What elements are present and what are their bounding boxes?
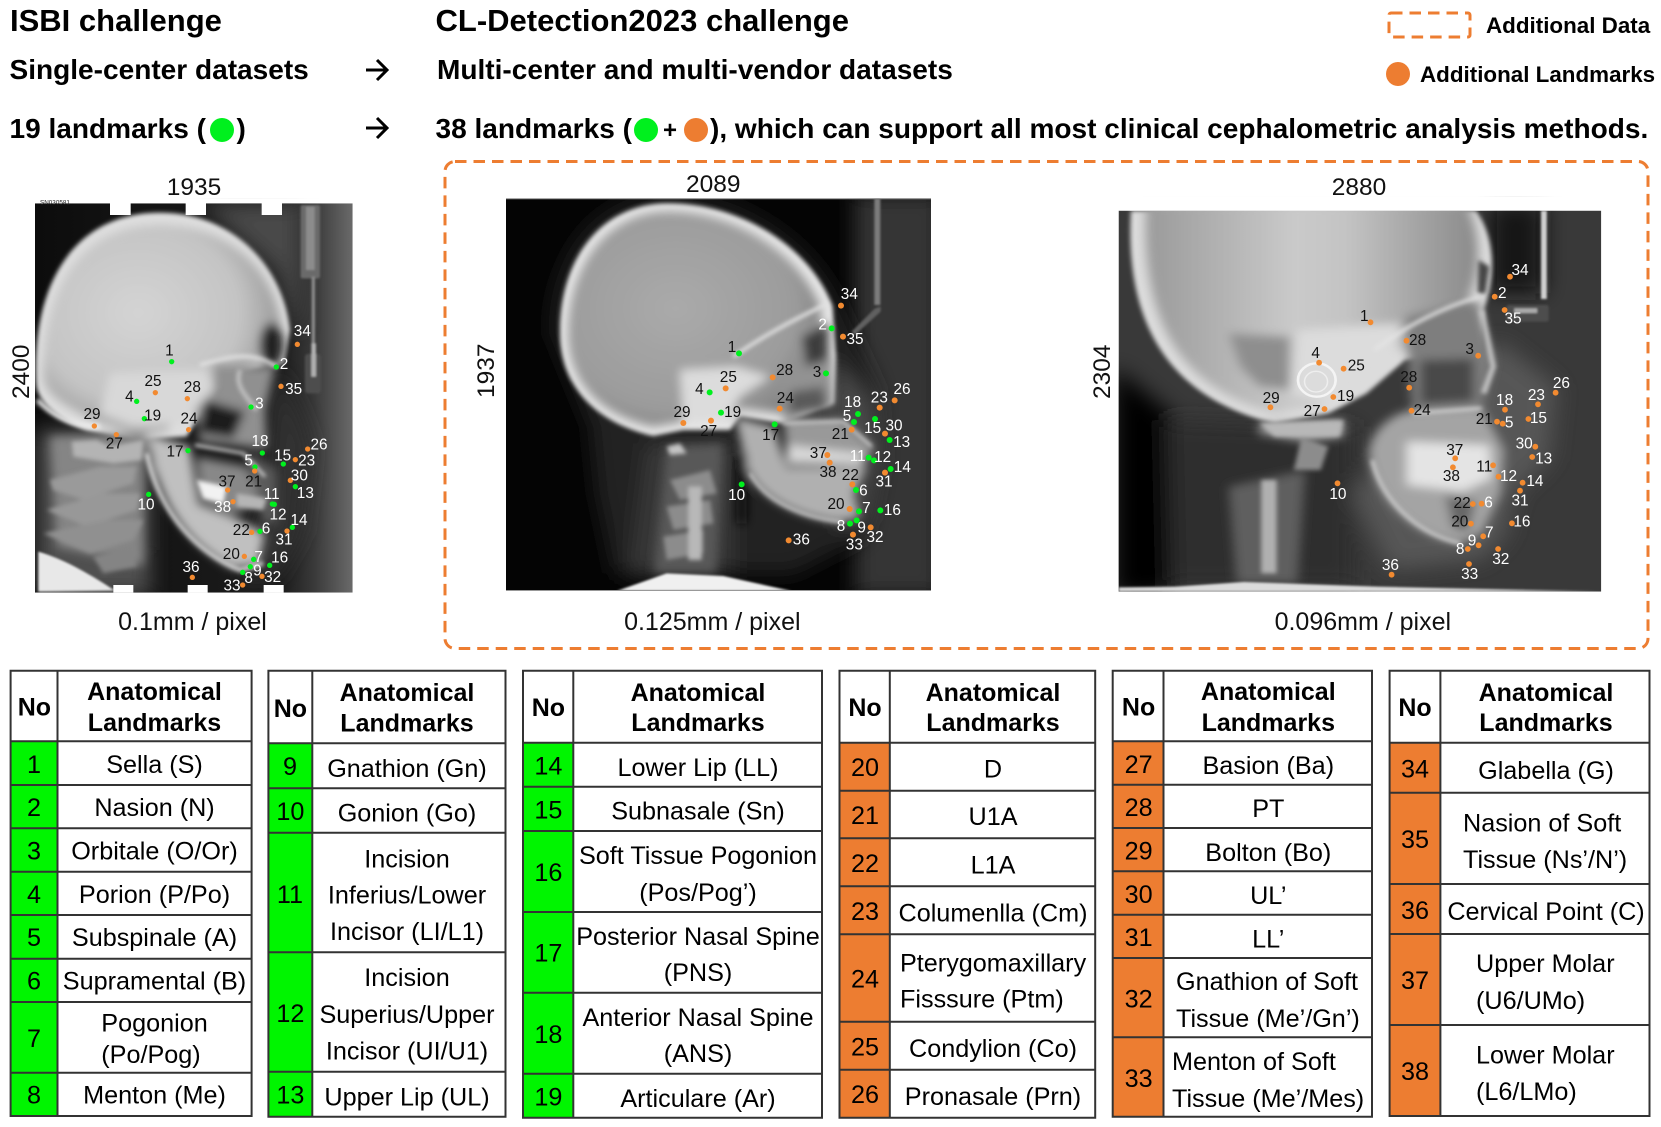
landmarks on image 2: 23 xyxy=(871,389,888,406)
image panel: CL-Detection x-ray B xyxy=(1089,174,1601,636)
rows: Tissue (Ns’/N’) xyxy=(1463,846,1627,874)
table: landmarks 14-19 xyxy=(523,671,822,1118)
rows: Incision xyxy=(364,845,450,873)
header xyxy=(1122,678,1336,737)
width label 2880: 2880 xyxy=(1332,174,1386,201)
landmarks on image 2: 15 xyxy=(864,420,881,437)
landmarks on image 1: 22 xyxy=(233,522,250,539)
rows: 6 xyxy=(27,967,41,995)
rows: LL’ xyxy=(1252,925,1284,953)
rows: Porion (P/Po) xyxy=(79,881,230,909)
landmarks on image 1: 9 xyxy=(253,562,262,579)
landmarks on image 3: 15 xyxy=(1530,410,1547,427)
landmarks on image 3: 20 xyxy=(1451,514,1468,530)
rows: Menton (Me) xyxy=(83,1081,226,1109)
landmarks on image 2: 19 xyxy=(724,404,741,421)
rows: Upper Lip (UL) xyxy=(324,1083,490,1111)
landmarks on image 2: 28 xyxy=(776,362,793,379)
rows: 26 xyxy=(851,1081,879,1109)
rows: 10 xyxy=(276,798,304,826)
rows: 21 xyxy=(851,802,879,830)
landmarks on image 2: 25 xyxy=(720,369,737,386)
table: landmarks 1-8 xyxy=(11,671,252,1116)
rows: 30 xyxy=(1125,881,1153,909)
landmarks on image 1: 31 xyxy=(275,531,293,548)
title: CL-Detection2023 challenge: CL-Detection2023 challenge xyxy=(436,3,849,38)
rows: (Pos/Pog’) xyxy=(639,879,757,907)
landmarks on image 1: 11 xyxy=(264,486,280,503)
text: single-center datasets: Single-center datasets xyxy=(10,54,309,85)
landmarks on image 2: 4 xyxy=(695,381,704,398)
landmarks on image 3: 3 xyxy=(1465,341,1474,358)
rows: (ANS) xyxy=(664,1040,732,1068)
rows: Supramental (B) xyxy=(63,967,246,995)
landmarks on image 1: 14 xyxy=(290,512,308,529)
landmarks on image 1: 7 xyxy=(254,549,263,566)
landmarks on image 2: 35 xyxy=(846,331,864,348)
landmarks on image 2: 11 xyxy=(850,448,866,465)
landmarks on image 1: 38 xyxy=(214,499,231,516)
landmarks on image 2: 22 xyxy=(842,467,859,484)
landmarks on image 1: 32 xyxy=(264,569,281,586)
landmarks on image 1: 25 xyxy=(144,373,162,390)
landmarks on image 2: 38 xyxy=(819,464,837,481)
landmarks on image 2: 3 xyxy=(813,364,821,381)
header: No xyxy=(18,694,51,722)
landmarks on image 2: 32 xyxy=(866,529,884,546)
landmarks on image 3: 7 xyxy=(1485,524,1494,542)
landmarks on image 3: 30 xyxy=(1516,436,1533,452)
rows: (PNS) xyxy=(664,959,732,987)
rows: Subspinale (A) xyxy=(72,924,237,952)
rows: Gonion (Go) xyxy=(338,799,476,827)
rows: Superius/Upper xyxy=(319,1001,495,1029)
landmarks on image 3: 27 xyxy=(1304,403,1321,420)
landmarks on image 3: 34 xyxy=(1511,262,1529,279)
landmarks on image 2: 33 xyxy=(846,536,863,553)
landmarks on image 1: 10 xyxy=(137,496,155,513)
landmarks on image 1: 2 xyxy=(280,356,288,373)
header: Landmarks xyxy=(926,709,1060,737)
text: 38 landmarks: ), which can support all most clinical cephalometric analysis methods. xyxy=(710,113,1648,144)
landmarks on image 2: 24 xyxy=(777,390,794,407)
landmarks on image 3: 13 xyxy=(1535,450,1552,468)
landmarks on image 3: 26 xyxy=(1553,375,1570,392)
landmarks on image 3: 32 xyxy=(1492,551,1509,568)
landmarks on image 3: 9 xyxy=(1468,532,1476,550)
number column fill xyxy=(523,743,573,1118)
header: No xyxy=(1398,694,1432,722)
rows: 11 xyxy=(277,881,303,909)
rows: 13 xyxy=(276,1081,304,1109)
landmarks on image 3: 6 xyxy=(1484,494,1493,512)
landmarks on image 2: 14 xyxy=(894,459,911,476)
landmarks on image 1: 12 xyxy=(269,506,287,523)
rows: Nasion (N) xyxy=(94,794,215,822)
resolution label: 0.125mm / pixel xyxy=(624,608,801,636)
landmarks on image 2: 10 xyxy=(728,487,745,504)
table: landmarks 27-33 xyxy=(1113,671,1372,1117)
landmarks on image 2 xyxy=(673,286,911,553)
landmarks on image 1: 24 xyxy=(180,410,198,427)
landmarks on image 1: 1 xyxy=(165,342,174,359)
rows: Fisssure (Ptm) xyxy=(900,985,1064,1013)
arrow: landmarks xyxy=(366,118,387,138)
landmarks on image 2: 36 xyxy=(793,531,810,548)
rows: (L6/LMo) xyxy=(1476,1078,1577,1106)
header xyxy=(1398,679,1613,737)
header: No xyxy=(848,694,882,722)
landmarks on image 1: 19 xyxy=(144,407,161,424)
rows: 38 xyxy=(1401,1058,1429,1086)
rows: Bolton (Bo) xyxy=(1205,839,1331,867)
landmarks on image 3: 16 xyxy=(1513,514,1530,530)
rows: 9 xyxy=(283,753,297,781)
rows: 34 xyxy=(1401,755,1429,783)
landmarks on image 1: 34 xyxy=(294,323,311,340)
landmarks on image 2: 9 xyxy=(857,519,866,536)
rows: Incisor (UI/U1) xyxy=(326,1037,488,1065)
height label 2304: 2304 xyxy=(1089,344,1116,399)
rows: 16 xyxy=(534,859,562,887)
landmarks on image 1: 28 xyxy=(184,379,201,396)
rows: 31 xyxy=(1125,924,1153,952)
text: multi-center datasets: Multi-center and multi-vendor datasets xyxy=(437,54,953,85)
rows: U1A xyxy=(968,803,1018,831)
text: 19 landmarks: 19 landmarks ( xyxy=(10,113,207,144)
header: Anatomical xyxy=(87,678,222,706)
landmarks on image 3: 36 xyxy=(1382,557,1399,574)
resolution label: 0.096mm / pixel xyxy=(1275,608,1451,636)
rows: Nasion of Soft xyxy=(1463,809,1621,837)
rows: 23 xyxy=(851,898,879,926)
rows: Soft Tissue Pogonion xyxy=(579,842,817,870)
landmarks on image 1: 37 xyxy=(218,473,236,490)
landmarks on image 2: 29 xyxy=(673,404,691,421)
header: Anatomical xyxy=(1479,679,1613,707)
landmarks on image 2: 1 xyxy=(728,339,736,356)
landmarks on image 1: 36 xyxy=(182,559,200,576)
landmarks on image 1: 15 xyxy=(274,447,291,464)
number column fill xyxy=(1113,741,1164,1117)
rows: Cervical Point (C) xyxy=(1447,898,1645,926)
width label 2089: 2089 xyxy=(686,171,741,198)
landmarks on image 2: 30 xyxy=(885,417,903,434)
landmarks on image 1: 35 xyxy=(285,381,302,398)
legend: additional data: Additional Data xyxy=(1486,13,1651,38)
landmarks on image 1: 13 xyxy=(297,485,314,502)
rows: 27 xyxy=(1125,751,1153,779)
landmarks on image 2: 12 xyxy=(874,449,891,466)
rows: 36 xyxy=(1401,897,1429,925)
table: landmarks 9-13 xyxy=(268,671,506,1117)
rows: 5 xyxy=(27,924,41,952)
rows: 25 xyxy=(851,1033,879,1061)
rows xyxy=(1125,751,1364,1113)
x-ray image 1: SN030581 xyxy=(40,200,70,207)
rows: (U6/UMo) xyxy=(1476,987,1585,1015)
landmarks on image 3: 18 xyxy=(1496,392,1513,409)
rows: UL’ xyxy=(1250,882,1287,910)
header: No xyxy=(274,695,307,723)
rows: Pterygomaxillary xyxy=(900,949,1087,977)
landmarks on image 3: 23 xyxy=(1528,387,1545,404)
image panel: CL-Detection x-ray A xyxy=(473,171,942,636)
header: Landmarks xyxy=(340,709,474,737)
landmarks on image 1: 29 xyxy=(83,406,101,423)
landmarks on image 2: 16 xyxy=(884,502,901,519)
landmarks on image 2: 34 xyxy=(841,286,858,303)
landmarks on image 1: 3 xyxy=(255,395,264,412)
number column fill xyxy=(268,743,312,1117)
header: Landmarks xyxy=(1202,709,1335,737)
rows: 18 xyxy=(534,1021,562,1049)
landmarks on image 1: 30 xyxy=(291,467,308,484)
landmarks on image 2: 27 xyxy=(700,423,717,440)
landmarks on image 2: 37 xyxy=(810,445,827,462)
landmarks on image 3: 24 xyxy=(1414,402,1431,419)
header: Anatomical xyxy=(926,679,1060,707)
landmarks on image 2: 13 xyxy=(893,434,910,451)
rows: Gnathion (Gn) xyxy=(327,755,487,783)
rows: Pronasale (Prn) xyxy=(905,1083,1081,1111)
rows: (Po/Pog) xyxy=(101,1041,201,1069)
rows: Subnasale (Sn) xyxy=(611,797,785,825)
landmarks on image 1: 18 xyxy=(251,433,269,450)
rows: Anterior Nasal Spine xyxy=(582,1004,814,1032)
landmarks on image 1: 16 xyxy=(271,549,288,566)
landmarks on image 3: 35 xyxy=(1504,310,1522,328)
legend: additional data xyxy=(1389,13,1651,38)
landmarks on image 3: 14 xyxy=(1526,473,1544,490)
header: Anatomical xyxy=(340,679,474,707)
landmarks on image 2: 7 xyxy=(862,500,871,517)
width label 1935: 1935 xyxy=(167,174,221,201)
header: Anatomical xyxy=(1201,678,1336,706)
landmarks on image 2: 8 xyxy=(837,518,845,535)
landmarks on image 3: 33 xyxy=(1461,566,1478,583)
landmarks on image 2: 6 xyxy=(859,482,868,499)
table: landmarks 20-26 xyxy=(840,671,1095,1118)
landmarks on image 3: 8 xyxy=(1456,541,1464,558)
rows: 2 xyxy=(27,794,41,822)
landmarks on image 3: 12 xyxy=(1500,468,1517,485)
arrow: datasets xyxy=(366,60,387,80)
title: ISBI challenge: ISBI challenge xyxy=(10,3,222,38)
landmarks on image 3: 25 xyxy=(1348,358,1365,374)
rows: 4 xyxy=(27,881,41,909)
header: Landmarks xyxy=(631,709,765,737)
landmarks on image 3: 29 xyxy=(1263,390,1280,407)
rows: Glabella (G) xyxy=(1478,757,1614,785)
number column fill xyxy=(11,741,58,1116)
landmarks on image 2: 20 xyxy=(827,496,845,513)
x-ray image 2 xyxy=(506,193,942,597)
landmarks on image 3: 4 xyxy=(1311,345,1320,362)
rows: 24 xyxy=(851,965,879,993)
landmarks on image 2: 5 xyxy=(843,408,851,425)
rows xyxy=(534,752,820,1113)
landmarks on image 3: 22 xyxy=(1454,495,1471,512)
rows: 3 xyxy=(27,837,41,865)
landmarks on image 2: 17 xyxy=(762,427,779,444)
rows: 35 xyxy=(1401,826,1429,854)
landmarks on image 1 xyxy=(83,323,328,594)
rows: Sella (S) xyxy=(106,751,203,779)
rows: 17 xyxy=(534,939,562,967)
header: Landmarks xyxy=(88,709,221,737)
panel: additional data dashed frame xyxy=(445,162,1648,648)
rows: L1A xyxy=(971,851,1016,879)
landmarks on image 3: 2 xyxy=(1498,285,1507,302)
rows xyxy=(27,751,246,1109)
rows: 12 xyxy=(276,1000,304,1028)
rows: 1 xyxy=(27,751,41,779)
landmarks on image 1: 27 xyxy=(106,435,123,452)
header xyxy=(848,679,1060,737)
rows xyxy=(276,753,495,1111)
rows: 33 xyxy=(1125,1065,1153,1093)
landmarks on image 1: 20 xyxy=(223,546,240,563)
text: 19 landmarks: ) xyxy=(236,113,246,144)
landmarks on image 1: 8 xyxy=(244,570,253,587)
header xyxy=(274,679,474,738)
legend: additional landmarks: Additional Landmarks xyxy=(1420,62,1655,87)
landmarks on image 1: 33 xyxy=(223,577,241,594)
rows: 29 xyxy=(1125,837,1153,865)
landmarks on image 2: 26 xyxy=(893,381,911,398)
table: landmarks 34-38 xyxy=(1390,671,1650,1116)
x-ray image 1 xyxy=(35,198,353,597)
landmarks on image 2: 31 xyxy=(875,473,893,490)
landmarks on image 1: 23 xyxy=(298,452,315,469)
rows: Incision xyxy=(364,964,450,992)
rows: 8 xyxy=(27,1081,41,1109)
image panel: ISBI x-ray xyxy=(8,174,353,636)
rows: 14 xyxy=(534,752,562,780)
landmarks on image 3: 19 xyxy=(1337,388,1354,405)
landmarks on image 1: 21 xyxy=(245,473,262,490)
rows: D xyxy=(984,755,1002,783)
landmarks on image 3: 5 xyxy=(1505,414,1513,432)
rows: Tissue (Me’/Mes) xyxy=(1172,1085,1364,1113)
header: Anatomical xyxy=(631,679,765,707)
landmarks on image 1: 6 xyxy=(262,520,270,537)
height label 1937: 1937 xyxy=(473,343,500,398)
rows: Lower Lip (LL) xyxy=(617,754,779,782)
rows: Posterior Nasal Spine xyxy=(576,923,820,951)
landmarks on image 3: 37 xyxy=(1446,442,1463,459)
header xyxy=(532,679,765,737)
landmarks on image 3: 21 xyxy=(1476,411,1493,428)
rows: 15 xyxy=(534,796,562,824)
landmarks on image 1: 26 xyxy=(310,436,328,453)
text: 38 landmarks: + xyxy=(663,117,677,144)
landmarks on image 3: 11 xyxy=(1476,458,1492,476)
landmarks on image 2: 18 xyxy=(844,394,861,411)
header: Landmarks xyxy=(1479,709,1613,737)
rows: Upper Molar xyxy=(1476,950,1615,978)
rows xyxy=(851,754,1087,1111)
rows: Orbitale (O/Or) xyxy=(71,837,238,865)
number column fill xyxy=(840,743,890,1118)
rows: Incisor (LI/L1) xyxy=(330,918,484,946)
header: No xyxy=(1122,693,1155,721)
rows: PT xyxy=(1252,795,1284,823)
landmarks on image 1: 17 xyxy=(166,443,184,460)
landmarks on image 1: 4 xyxy=(125,388,134,405)
landmarks on image 3: 1 xyxy=(1360,308,1369,325)
rows: Tissue (Me’/Gn’) xyxy=(1176,1005,1360,1033)
rows: Columenlla (Cm) xyxy=(899,899,1087,927)
header xyxy=(18,678,222,737)
header: No xyxy=(532,694,565,722)
landmarks on image 1: 5 xyxy=(244,452,253,469)
landmarks on image 3: 28 xyxy=(1400,369,1417,386)
x-ray image 3 xyxy=(1114,197,1601,597)
rows: Gnathion of Soft xyxy=(1176,968,1358,996)
rows: Pogonion xyxy=(101,1009,208,1037)
rows: 28 xyxy=(1125,794,1153,822)
rows: Condylion (Co) xyxy=(909,1035,1077,1063)
rows: Lower Molar xyxy=(1476,1041,1615,1069)
landmarks on image 2: 2 xyxy=(818,316,827,333)
rows: Articulare (Ar) xyxy=(620,1085,776,1113)
height label 2400: 2400 xyxy=(8,344,35,399)
rows: 7 xyxy=(27,1025,41,1053)
text: 38 landmarks: 38 landmarks ( xyxy=(436,113,633,144)
resolution label: 0.1mm / pixel xyxy=(118,608,267,636)
rows: 19 xyxy=(534,1083,562,1111)
rows: 37 xyxy=(1401,967,1429,995)
rows: 22 xyxy=(851,850,879,878)
rows: 32 xyxy=(1125,985,1153,1013)
landmarks on image 3: 38 xyxy=(1443,468,1460,485)
landmarks on image 3: 31 xyxy=(1511,492,1529,510)
rows xyxy=(1401,755,1645,1106)
landmarks on image 3 xyxy=(1263,262,1570,583)
rows: 20 xyxy=(851,754,879,782)
landmarks on image 3: 10 xyxy=(1329,486,1346,503)
number column fill xyxy=(1390,743,1440,1116)
rows: Basion (Ba) xyxy=(1202,752,1334,780)
rows: Menton of Soft xyxy=(1172,1048,1336,1076)
landmarks on image 2: 21 xyxy=(832,426,849,443)
landmarks on image 3: 28 xyxy=(1409,332,1426,349)
rows: Inferius/Lower xyxy=(328,881,486,909)
